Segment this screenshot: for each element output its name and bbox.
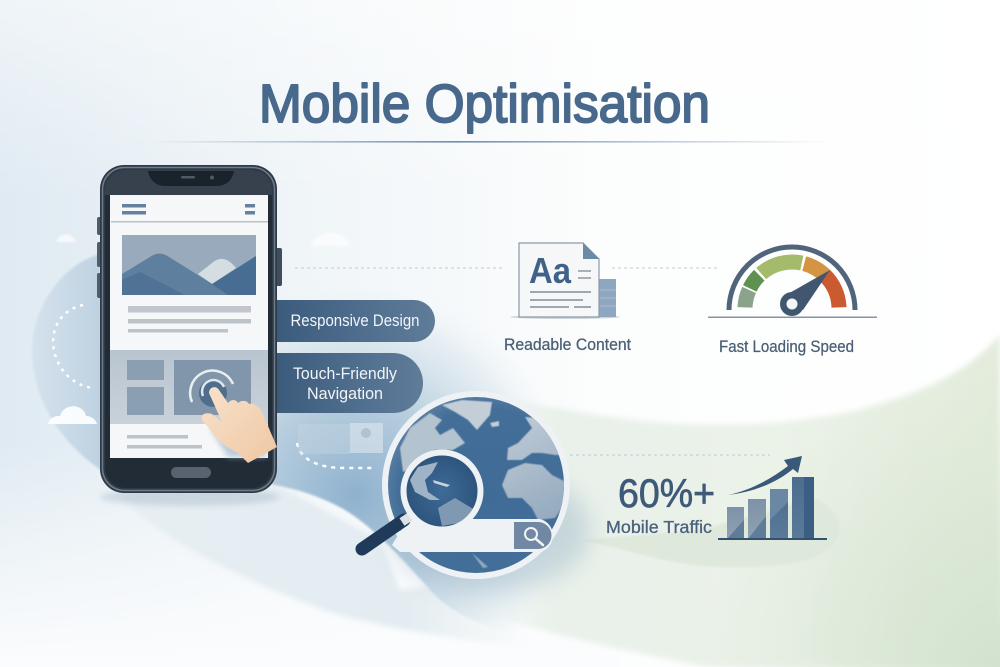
- green sweep: [440, 335, 1000, 667]
- screen: [110, 195, 268, 458]
- green blob under chart: [580, 498, 840, 567]
- ghost boxes: [298, 424, 350, 454]
- phone: [97, 165, 282, 493]
- bar chart: [718, 456, 827, 540]
- icon: speed gauge: [708, 247, 877, 318]
- phone shadow: [100, 488, 280, 506]
- pill: Touch-Friendly Navigation: [270, 353, 423, 413]
- globe: [382, 391, 570, 579]
- pill: Responsive Design: Responsive Design: [290, 312, 420, 330]
- arrow: [728, 456, 802, 495]
- pill: Touch-Friendly Navigation: Navigation: [307, 385, 383, 403]
- notch: [148, 171, 234, 186]
- title: Mobile Optimisation: [259, 74, 710, 134]
- dashed arcs: [53, 305, 93, 388]
- pill: Touch-Friendly Navigation: Touch-Friendly: [293, 365, 398, 383]
- connector lines: [295, 268, 770, 455]
- icon: magnifying glass: [362, 452, 480, 549]
- icon: document Aa: Aa: [529, 250, 572, 291]
- icon: touch ripple and hand: [190, 371, 277, 463]
- blue swoosh: [270, 270, 570, 640]
- label: Mobile Traffic: Mobile Traffic: [606, 517, 712, 537]
- icon: document Aa: [510, 243, 620, 319]
- label: Readable Content: Readable Content: [504, 336, 631, 354]
- soft sheet under phone: [117, 485, 540, 650]
- label: Fast Loading Speed: Fast Loading Speed: [719, 338, 854, 356]
- pill: Responsive Design: [270, 300, 435, 342]
- hero image: [122, 235, 256, 295]
- left blue lobe: [32, 254, 104, 472]
- clouds: [56, 234, 80, 242]
- globe shadow: [390, 468, 590, 592]
- stat: 60%+: 60%+: [618, 472, 715, 516]
- search bar: [392, 519, 553, 552]
